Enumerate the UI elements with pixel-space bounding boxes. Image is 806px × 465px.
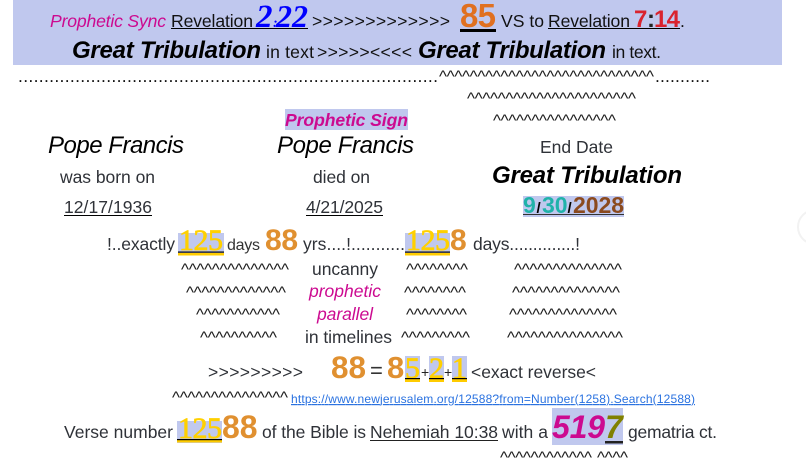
middle caret block: ^^^^^^^^ xyxy=(406,260,468,279)
center caption: uncanny prophetic parallel in timelines xyxy=(305,259,392,347)
header line 1: : xyxy=(647,6,655,33)
header line 1: Prophetic Sync xyxy=(50,11,166,31)
header line 2 xyxy=(72,37,661,64)
column: born: was born on xyxy=(59,167,155,187)
left caret block xyxy=(181,260,289,347)
header line 2: Great Tribulation xyxy=(72,37,261,64)
column: end date: / xyxy=(536,200,542,217)
center caption: uncanny prophetic parallel in timelines: in timelines xyxy=(305,327,392,347)
source link: https://www.newjerusalem.org/12588?from=Number(1258).Search(12588) xyxy=(291,392,695,406)
88 equation line: >>>>>>>>> xyxy=(208,362,303,382)
prophetic sign tag: Prophetic Sign xyxy=(285,110,408,130)
dotted line with carets xyxy=(18,66,710,86)
header line 2: in text. xyxy=(612,42,661,62)
caret run before link: ^^^^^^^^^^^^^^^ xyxy=(172,388,288,407)
timeline count line: 8 xyxy=(450,224,467,257)
timeline count line: days..............! xyxy=(473,234,580,254)
left caret block: ^^^^^^^^^^ xyxy=(200,328,277,347)
88 equation line: = xyxy=(370,358,383,383)
center caption: uncanny prophetic parallel in timelines: prophetic xyxy=(308,281,381,301)
column: end date: Great Tribulation xyxy=(492,162,682,189)
column: died xyxy=(277,132,414,217)
header line 1: 7 xyxy=(634,6,647,33)
verse line: Nehemiah 10:38 xyxy=(370,422,498,442)
center caption: uncanny prophetic parallel in timelines: uncanny xyxy=(312,259,378,279)
88 equation line xyxy=(208,349,596,385)
88 equation line: <exact reverse< xyxy=(471,362,596,382)
header line 2: in text xyxy=(266,42,314,62)
88 equation line: 5 xyxy=(405,352,420,385)
middle caret block xyxy=(401,260,470,347)
middle caret block: ^^^^^^^^^ xyxy=(401,328,470,347)
header line 1: . xyxy=(680,11,685,31)
header line 1: Revelation xyxy=(548,11,630,31)
column: end date: 9 xyxy=(523,192,536,218)
header line 1: : xyxy=(273,16,278,31)
header line 1: >>>>>>>>>>>>> xyxy=(312,11,450,31)
88 equation line: 1 xyxy=(452,352,467,385)
dotted line with carets: ^^^^^^^^^^^^^^^^^^^^^^^^^^^^ xyxy=(439,67,654,86)
header line 1: 14 xyxy=(654,6,681,33)
column: end date: End Date xyxy=(540,137,613,157)
header line 1: Revelation xyxy=(171,11,253,31)
timeline count line: 125 xyxy=(406,224,450,257)
88 equation line: + xyxy=(421,364,429,380)
timeline count line: yrs....!........... xyxy=(303,234,405,254)
center caption: uncanny prophetic parallel in timelines: parallel xyxy=(316,304,374,324)
verse line: of the Bible is xyxy=(262,422,366,442)
header band xyxy=(13,0,782,65)
column: died: died on xyxy=(313,167,370,187)
right caret block xyxy=(507,260,623,347)
88 equation line: 88 xyxy=(331,349,366,385)
right caret block: ^^^^^^^^^^^^^^ xyxy=(509,305,617,324)
timeline count line: 88 xyxy=(265,224,298,257)
timeline count line xyxy=(107,224,580,257)
faint circle at right edge xyxy=(798,210,806,244)
verse line: 519 xyxy=(552,409,605,445)
middle caret block: ^^^^^^^^ xyxy=(406,305,467,324)
column: died: Pope Francis xyxy=(277,132,414,159)
column: born: 12/17/1936 xyxy=(64,197,152,217)
88 equation line: 2 xyxy=(429,352,444,385)
column: died: 4/21/2025 xyxy=(306,197,383,217)
verse line: 88 xyxy=(222,409,258,445)
dotted line with carets: ................................................................................. xyxy=(18,66,438,86)
88 equation line: + xyxy=(444,364,452,380)
timeline count line: days xyxy=(227,237,260,254)
header line 1 xyxy=(50,0,685,35)
column: born xyxy=(48,132,184,217)
dotted line with carets: ........... xyxy=(655,66,710,86)
column: end date xyxy=(492,137,682,218)
88 equation line: 8 xyxy=(387,350,404,385)
verse line: with a xyxy=(501,422,548,442)
timeline count line: !..exactly xyxy=(107,234,175,254)
column: born: Pope Francis xyxy=(48,132,184,159)
left caret block: ^^^^^^^^^^^ xyxy=(196,305,280,324)
header line 2: Great Tribulation xyxy=(418,37,606,64)
middle caret block: ^^^^^^^^ xyxy=(404,283,466,302)
left caret block: ^^^^^^^^^^^^^ xyxy=(186,283,286,302)
column: end date: 2028 xyxy=(573,192,624,218)
header line 2: >>>>><<<< xyxy=(317,42,412,62)
timeline count line: 125 xyxy=(179,224,223,257)
verse line: gematria ct. xyxy=(628,422,717,442)
column: end date: 30 xyxy=(542,192,568,218)
column: end date: / xyxy=(568,200,572,217)
header line 1: VS to xyxy=(501,11,544,31)
verse line xyxy=(64,408,717,445)
right caret block: ^^^^^^^^^^^^^^^ xyxy=(507,328,623,347)
verse line: 7 xyxy=(605,409,625,445)
caret row 2: ^^^^^^^^^^^^^^^^^^^^^^ xyxy=(467,89,636,108)
left caret block: ^^^^^^^^^^^^^^ xyxy=(181,260,289,279)
header line 1: 2 xyxy=(255,0,272,35)
right caret block: ^^^^^^^^^^^^^^ xyxy=(512,283,620,302)
verse line: Verse number xyxy=(64,422,173,442)
caret row 3: ^^^^^^^^^^^^^^^^ xyxy=(493,111,616,130)
right caret block: ^^^^^^^^^^^^^^ xyxy=(514,260,622,279)
verse line: 125 xyxy=(178,412,222,445)
